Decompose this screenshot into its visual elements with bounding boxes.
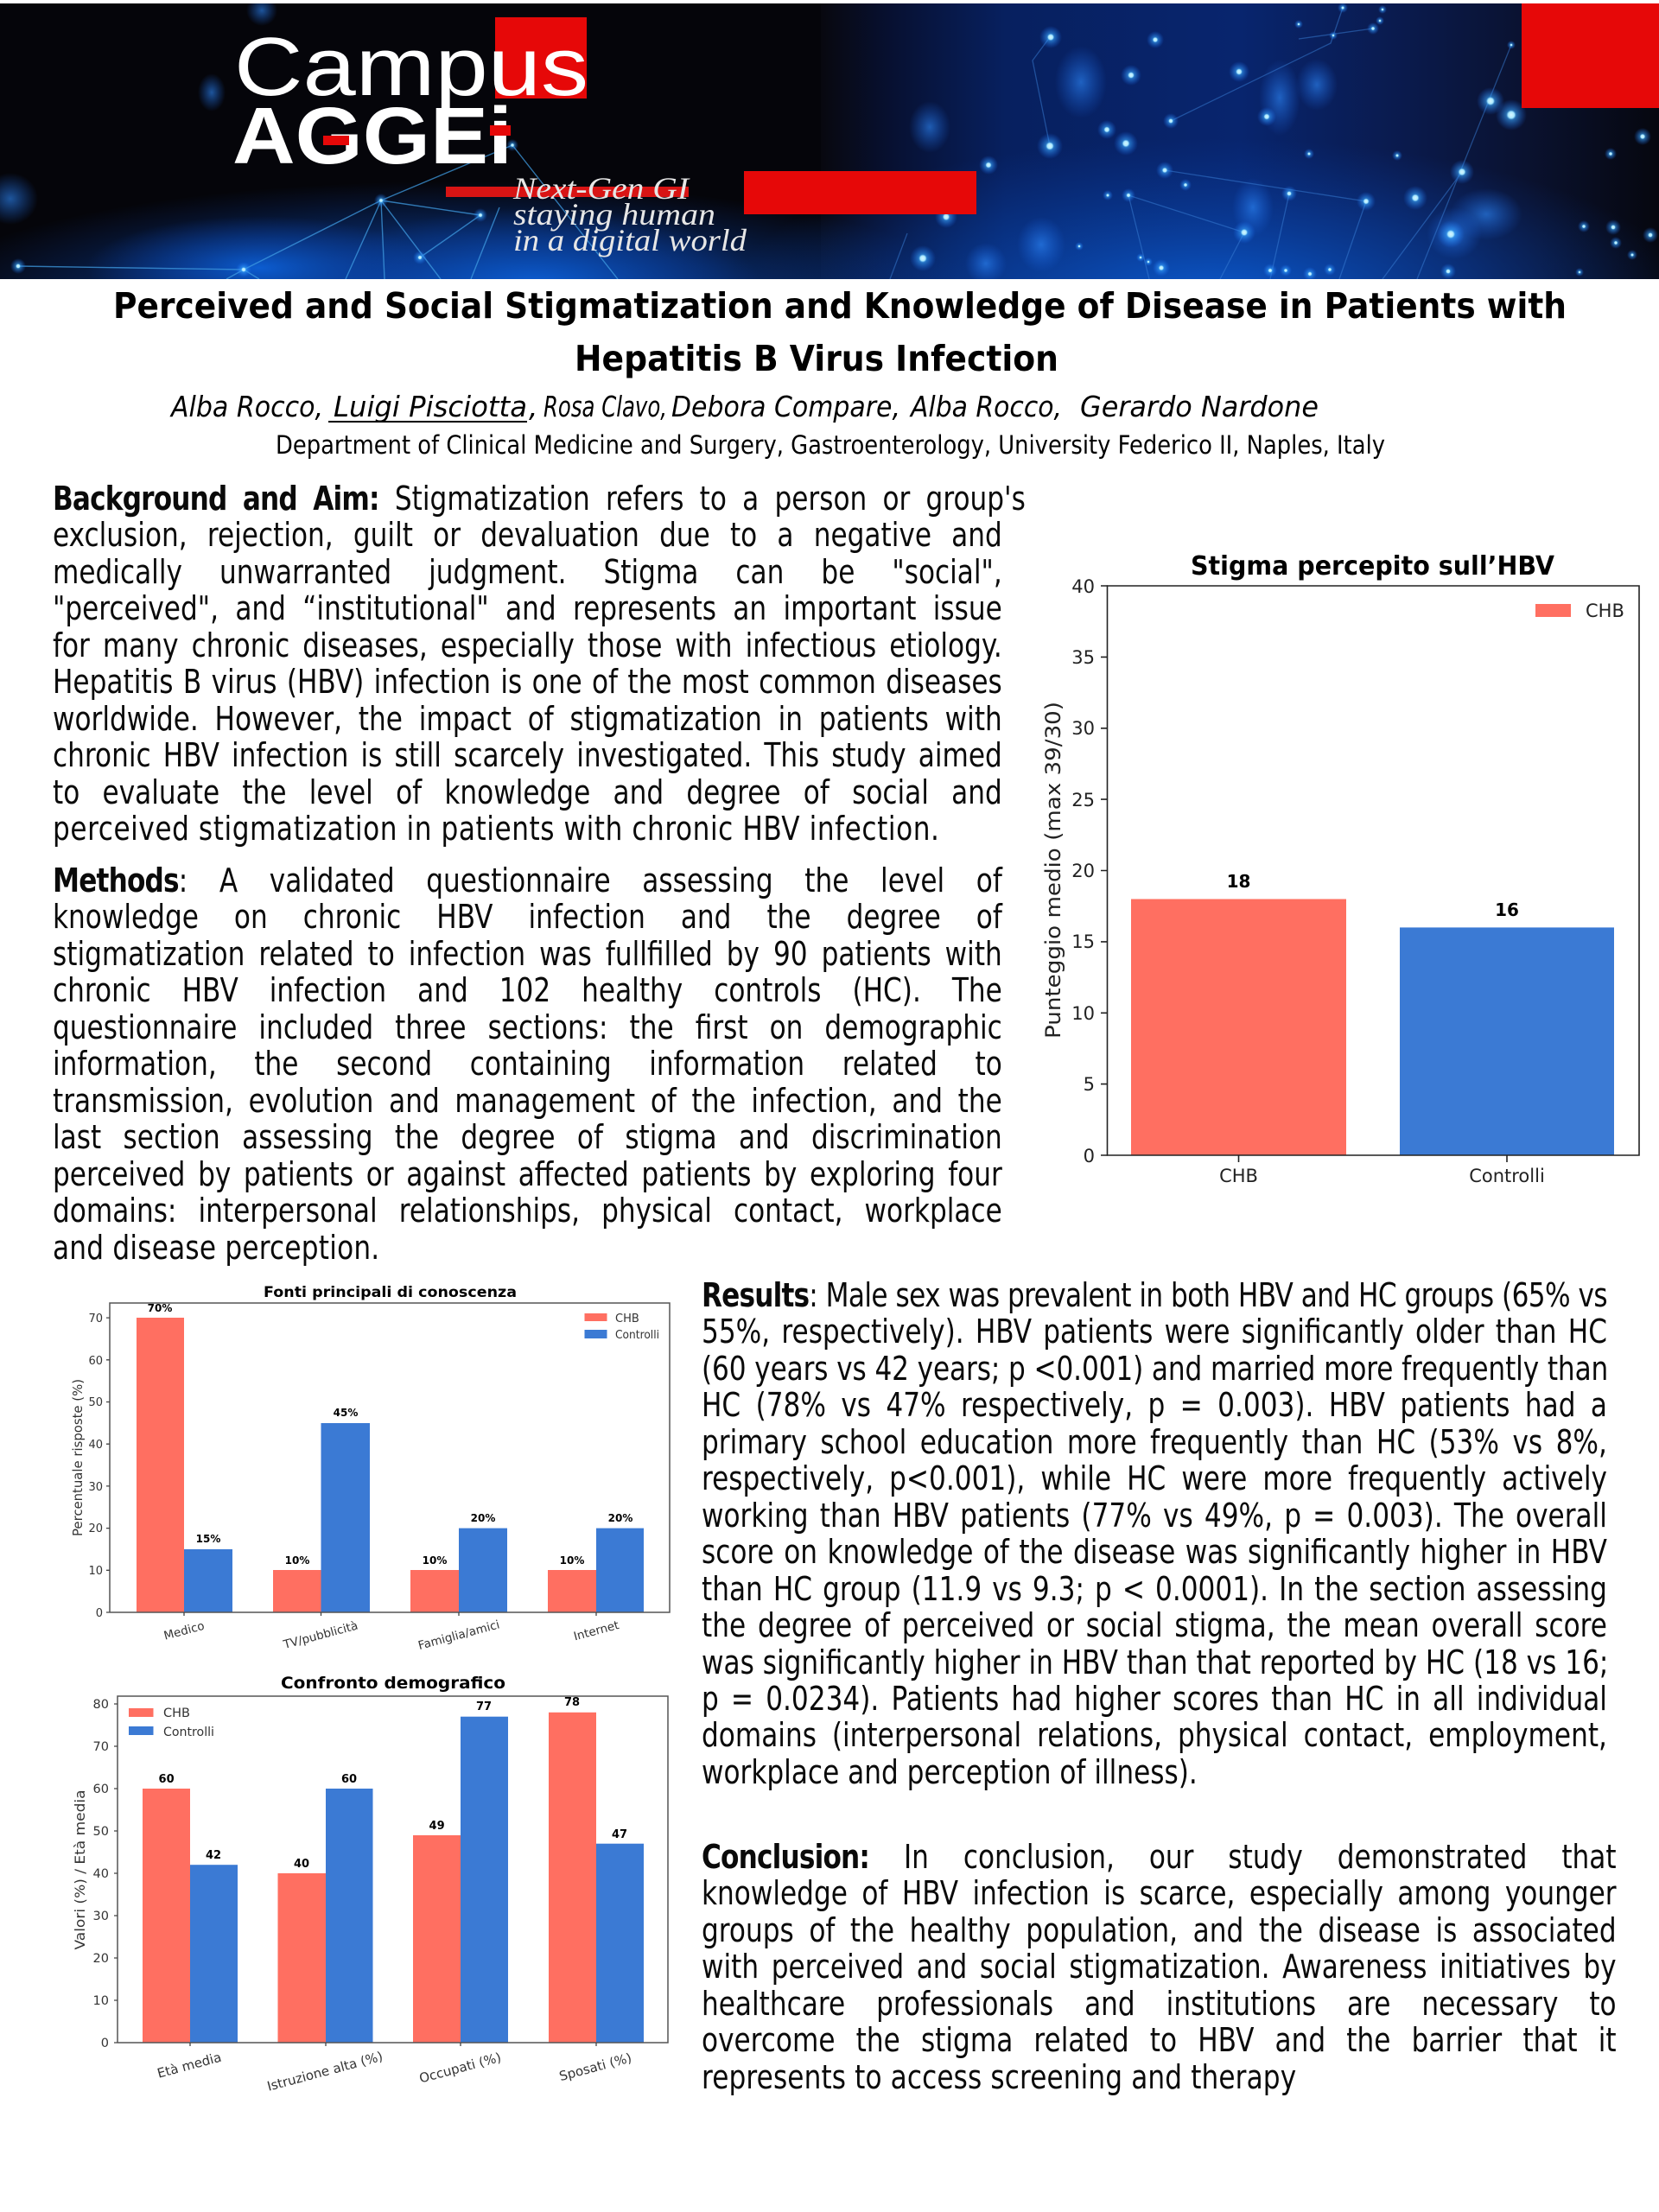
x axis labels: TV/pubblicità — [281, 1619, 359, 1652]
y axis ticks — [1071, 576, 1095, 1166]
authors: Alba Rocco, — [909, 390, 1062, 423]
text block: Methods: Methods: A validated questionnaire assessing the level of — [53, 861, 1002, 899]
y axis ticks — [88, 1313, 103, 1620]
legend — [1535, 601, 1624, 621]
text block: Methods: stigmatization related to infection was fullfilled by 90 patients with — [53, 935, 1002, 973]
right network lines — [890, 8, 1511, 279]
text block: Methods: transmission, evolution and management of the infection, and the — [53, 1082, 1002, 1120]
text block: Results: Results: Male sex was prevalent in both HBV and HC groups (65% vs — [702, 1276, 1607, 1314]
tagline: staying human — [513, 197, 715, 232]
text block: Conclusion: knowledge of HBV infection is scarce, especially among younger — [702, 1874, 1617, 1912]
text block: Results: 55%, respectively). HBV patients were significantly older than HC — [702, 1313, 1607, 1351]
text block: Conclusion: Conclusion: In conclusion, our study demonstrated that — [702, 1838, 1617, 1876]
text block: Results: (60 years vs 42 years; p <0.001) and married more frequently than — [702, 1350, 1608, 1388]
text block: Results: the degree of perceived or social stigma, the mean overall score — [702, 1606, 1607, 1644]
text block: Conclusion — [702, 1838, 1617, 2096]
title — [113, 285, 1567, 379]
bar values: 15% — [196, 1533, 220, 1545]
text block: Results: domains (interpersonal relations, physical contact, employment, — [702, 1716, 1607, 1754]
text block: Methods: knowledge on chronic HBV infection and the degree of — [53, 898, 1002, 936]
bars: Controlli — [190, 1717, 644, 2043]
legend: Controlli — [163, 1726, 214, 1739]
text block: Results: primary school education more frequently than HC (53% vs 8%, — [702, 1423, 1607, 1461]
bars: CHB — [143, 1713, 596, 2043]
affiliation: Department of Clinical Medicine and Surgery, Gastroenterology, University Federico II, Naples, Italy — [276, 430, 1385, 460]
text block: Methods: perceived by patients or against affected patients by exploring four — [53, 1155, 1002, 1193]
bar values: 78 — [564, 1696, 580, 1709]
y axis ticks: 20 — [1071, 861, 1095, 881]
tagline: in a digital world — [513, 223, 747, 257]
text block: Conclusion: with perceived and social stigmatization. Awareness initiatives by — [702, 1948, 1617, 1986]
y axis ticks: 10 — [88, 1565, 103, 1578]
glowing network dots — [10, 3, 1658, 281]
bar values: 16 — [1495, 899, 1519, 920]
authors: Rosa Clavo, — [543, 390, 667, 423]
x axis labels: Famiglia/amici — [416, 1618, 501, 1653]
chart: Stigma percepito sull'HBV — [1041, 551, 1639, 1186]
bar values: 45% — [334, 1407, 358, 1419]
text block: Methods: domains: interpersonal relationships, physical contact, workplace — [53, 1192, 1002, 1230]
logo: AGGEi: AGGEi — [232, 91, 512, 181]
y axis ticks: 0 — [101, 2037, 109, 2050]
x axis labels: Internet — [572, 1618, 620, 1643]
x axis labels: Sposati (%) — [557, 2050, 633, 2084]
text block: Background and Aim — [53, 480, 1026, 848]
y axis ticks: 40 — [1071, 576, 1095, 597]
x axis labels — [156, 2049, 633, 2094]
y axis ticks: 35 — [1071, 647, 1095, 668]
bar values: 49 — [429, 1820, 445, 1833]
text block: Methods: last section assessing the degree of stigma and discrimination — [53, 1118, 1002, 1156]
text block: Results: HC (78% vs 47% respectively, p = 0.003). HBV patients had a — [702, 1386, 1607, 1424]
bar: CHB 18 — [1131, 899, 1346, 1155]
authors: Alba Rocco, — [169, 390, 323, 423]
text block: Background and Aim: Hepatitis B virus (HBV) infection is one of the most common diseases — [53, 663, 1002, 701]
text block: Conclusion: healthcare professionals and institutions are necessary to — [702, 1985, 1617, 2023]
chart title: Confronto demografico — [281, 1674, 505, 1693]
y axis ticks: 30 — [1071, 718, 1095, 739]
y axis ticks: 30 — [88, 1481, 103, 1494]
text block: Methods: and disease perception. — [53, 1229, 379, 1267]
text block: Results: workplace and perception of illness). — [702, 1753, 1198, 1791]
red block: centre — [744, 171, 976, 214]
bar values — [148, 1302, 632, 1567]
bar values: 77 — [476, 1700, 492, 1713]
text block: Background and Aim: exclusion, rejection, guilt or devaluation due to a negative and — [53, 516, 1002, 554]
y axis ticks — [93, 1698, 109, 2050]
bar values: 60 — [159, 1773, 175, 1786]
text block: Results: than HC group (11.9 vs 9.3; p < 0.0001). In the section assessing — [702, 1570, 1607, 1608]
text block: Results: score on knowledge of the disease was significantly higher in HBV — [702, 1533, 1607, 1571]
text block: Methods: information, the second containing information related to — [53, 1045, 1002, 1083]
authors: Debora Compare, — [671, 390, 900, 423]
y axis ticks: 60 — [88, 1355, 103, 1368]
authors: Gerardo Nardone — [1080, 390, 1319, 423]
text block: Background and Aim: worldwide. However, the impact of stigmatization in patients with — [53, 700, 1002, 738]
logo: AGGEi — [235, 105, 511, 164]
tagline: Next-Gen GI — [512, 171, 690, 206]
bar values: 42 — [206, 1849, 221, 1862]
chart title: Fonti principali di conoscenza — [264, 1284, 517, 1301]
text block: Conclusion: groups of the healthy population, and the disease is associated — [702, 1911, 1617, 1949]
bar values: 10% — [423, 1554, 447, 1567]
text block: Background and Aim: to evaluate the level of knowledge and degree of social and — [53, 773, 1002, 811]
text block: Results — [702, 1276, 1608, 1791]
legend: CHB — [615, 1313, 639, 1325]
text block: Methods: questionnaire included three sections: the first on demographic — [53, 1008, 1002, 1046]
text block: Results: was significantly higher in HBV than that reported by HC (18 vs 16; — [702, 1643, 1608, 1681]
red block: top right — [1522, 3, 1659, 108]
bars: Controlli — [184, 1423, 644, 1612]
bar values — [1227, 871, 1519, 920]
bar values: 40 — [294, 1858, 309, 1871]
text block: Conclusion: represents to access screening and therapy — [702, 2058, 1296, 2096]
x axis labels: Controlli — [1469, 1166, 1545, 1186]
bar values: 47 — [612, 1828, 627, 1841]
title: Hepatitis B Virus Infection — [575, 338, 1058, 379]
bar values: 20% — [608, 1512, 632, 1524]
y axis ticks: 60 — [93, 1783, 109, 1796]
y axis ticks: 70 — [88, 1313, 103, 1325]
title: Perceived and Social Stigmatization and Knowledge of Disease in Patients with — [113, 285, 1567, 327]
header banner — [0, 3, 1659, 279]
y axis ticks: 70 — [93, 1740, 109, 1754]
left network lines — [18, 145, 618, 279]
y axis ticks: 40 — [88, 1439, 103, 1452]
bar values: 18 — [1227, 871, 1250, 892]
y axis ticks: 20 — [93, 1952, 109, 1966]
text block: Results: respectively, p<0.001), while HC were more frequently actively — [702, 1459, 1607, 1497]
text block: Results: working than HBV patients (77% vs 49%, p = 0.003). The overall — [702, 1497, 1607, 1535]
x axis labels: CHB — [1219, 1166, 1258, 1186]
bar: Controlli 16 — [1400, 927, 1614, 1155]
authors — [169, 390, 1319, 423]
text block: Background and Aim: for many chronic diseases, especially those with infectious etiology. — [53, 626, 1002, 664]
legend — [129, 1707, 214, 1739]
tagline — [512, 171, 747, 257]
authors: Luigi Pisciotta — [334, 390, 527, 423]
x axis labels: Occupati (%) — [417, 2050, 503, 2087]
x axis labels: Istruzione alta (%) — [265, 2049, 385, 2094]
y axis ticks: 15 — [1071, 931, 1095, 952]
chart: Fonti principali di conoscenza — [70, 1284, 670, 1653]
red strip behind tagline — [446, 187, 689, 197]
chart: Confronto demografico — [72, 1674, 668, 2094]
y axis ticks: 10 — [1071, 1003, 1095, 1024]
y axis label: Punteggio medio (max 39/30) — [1041, 702, 1065, 1039]
y axis ticks: 0 — [1084, 1146, 1095, 1166]
x axis labels — [162, 1618, 620, 1653]
y axis ticks: 5 — [1084, 1074, 1095, 1095]
x axis labels: Età media — [156, 2050, 223, 2082]
authors: , — [529, 390, 537, 423]
y axis ticks: 10 — [93, 1994, 109, 2008]
text block: Background and Aim: "perceived", and “institutional" and represents an important issue — [53, 589, 1002, 627]
text block: Background and Aim: perceived stigmatization in patients with chronic HBV infection. — [53, 810, 939, 848]
legend: CHB — [1586, 601, 1624, 621]
legend: CHB — [163, 1707, 190, 1720]
bar values: 70% — [148, 1302, 172, 1314]
y axis ticks: 50 — [88, 1396, 103, 1409]
bar values: 10% — [285, 1554, 309, 1567]
y axis ticks: 0 — [96, 1607, 103, 1620]
logo: Campus: Campus — [234, 21, 588, 113]
text block: Methods — [53, 861, 1002, 1267]
y axis label: Percentuale risposte (%) — [70, 1379, 86, 1536]
bars: CHB — [137, 1318, 596, 1612]
y axis ticks: 25 — [1071, 790, 1095, 810]
legend: Controlli — [615, 1329, 659, 1342]
text block: Background and Aim: Background and Aim: Stigmatization refers to a person or group's — [53, 480, 1026, 518]
y axis label: Valori (%) / Età media — [72, 1790, 88, 1949]
text block: Conclusion: overcome the stigma related to HBV and the barrier that it — [702, 2021, 1617, 2059]
bar values: 60 — [341, 1773, 357, 1786]
text block: Background and Aim: chronic HBV infection is still scarcely investigated. This study aimed — [53, 736, 1002, 774]
x axis labels: Medico — [162, 1619, 206, 1643]
red block: logo — [495, 17, 587, 99]
bar values: 20% — [471, 1512, 495, 1524]
text block: Methods: chronic HBV infection and 102 healthy controls (HC). The — [53, 971, 1002, 1009]
legend — [584, 1313, 659, 1342]
y axis ticks: 80 — [93, 1698, 109, 1712]
text block: Results: p = 0.0234). Patients had higher scores than HC in all individual — [702, 1680, 1607, 1718]
text block: Background and Aim: medically unwarranted judgment. Stigma can be "social", — [53, 553, 1002, 591]
y axis ticks: 30 — [93, 1910, 109, 1923]
bar values: 10% — [560, 1554, 584, 1567]
y axis ticks: 40 — [93, 1867, 109, 1881]
bar values — [159, 1696, 627, 1871]
y axis ticks: 50 — [93, 1825, 109, 1839]
chart title: Stigma percepito sull’HBV — [1191, 551, 1555, 582]
y axis ticks: 20 — [88, 1522, 103, 1535]
x axis labels — [1219, 1166, 1545, 1186]
